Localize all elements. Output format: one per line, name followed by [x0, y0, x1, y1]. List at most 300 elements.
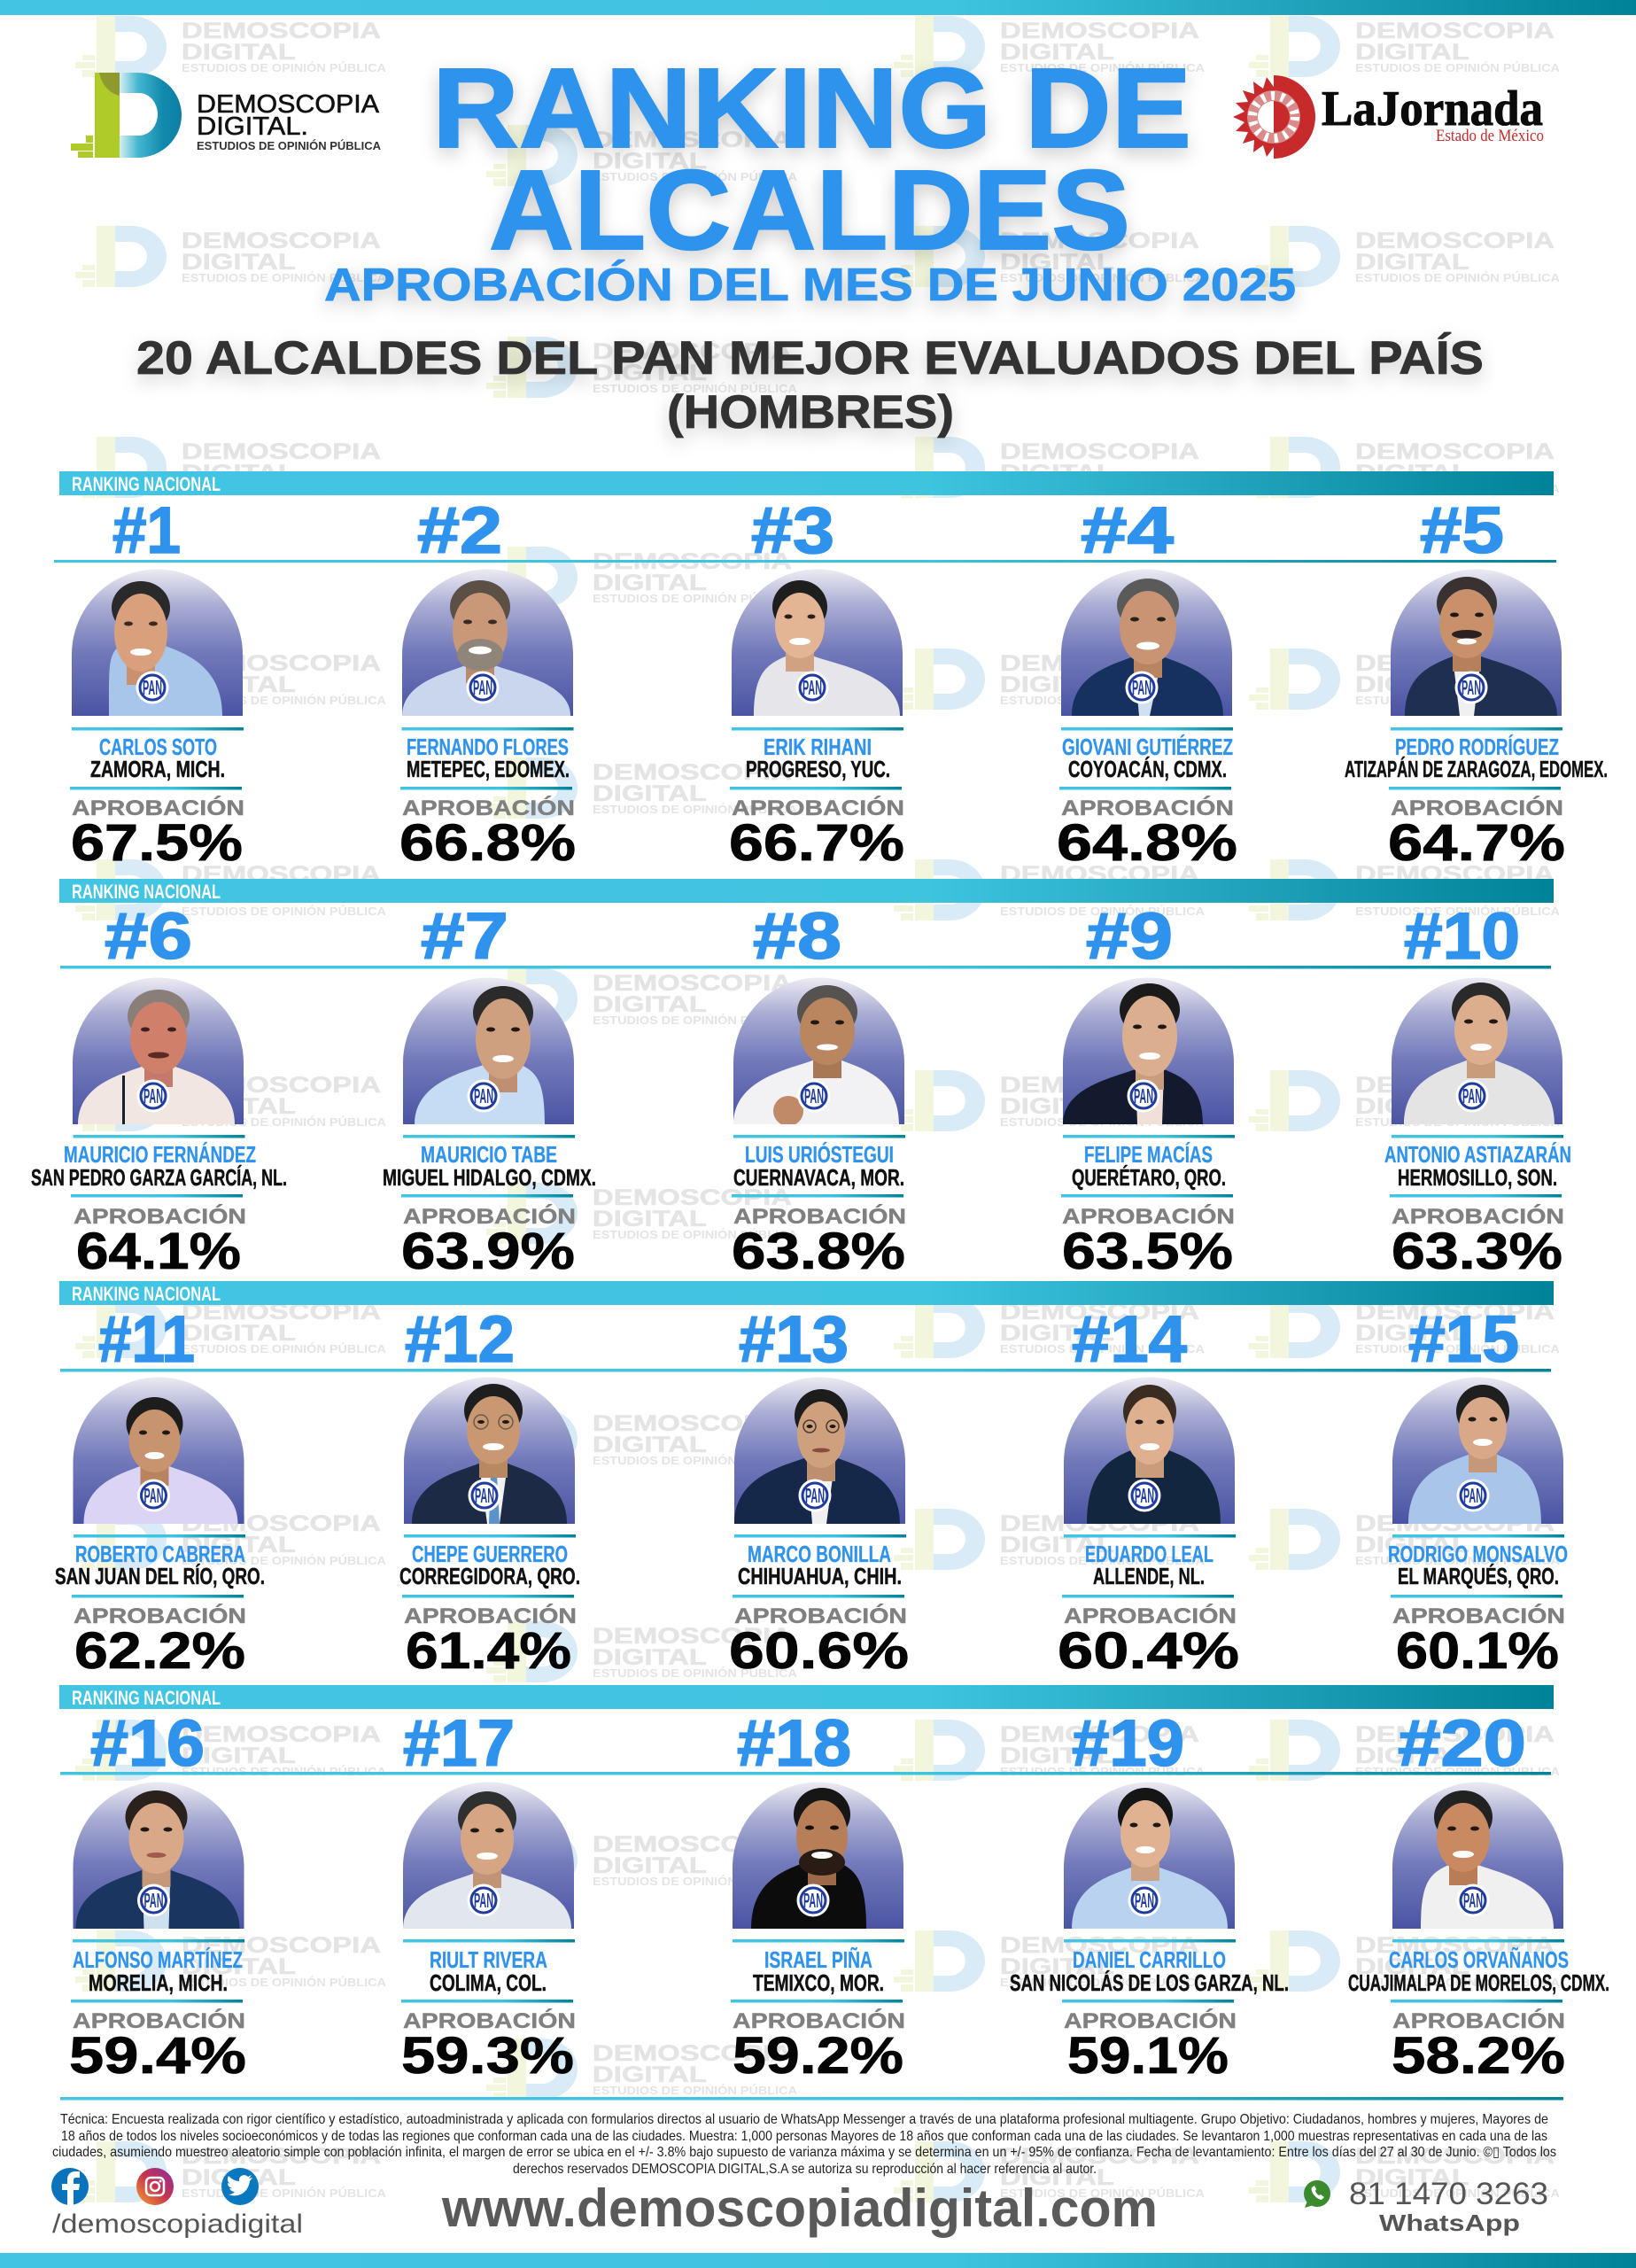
card: Mauricio Fernández: MAURICIO FERNÁNDEZ — [64, 1141, 256, 1168]
text: ESTUDIOS DE OPINIÓN PÚBLICA — [1355, 1115, 1561, 1129]
photo: Carlos Orvañanos: PAN — [1463, 1889, 1483, 1912]
heading: 20 alcaldes del PAN mejor evaluados — [136, 331, 1484, 439]
card: Carlos Orvañanos — [1348, 1706, 1609, 2085]
text: DIGITAL — [1355, 2165, 1469, 2190]
text: ESTUDIOS DE OPINIÓN PÚBLICA — [593, 1666, 798, 1680]
photo: Riult Rivera: PAN — [474, 1889, 493, 1912]
card: Roberto Cabrera: SAN JUAN DEL RÍO, QRO. — [55, 1563, 265, 1589]
card: Carlos Soto: APROBACIÓN — [72, 796, 244, 820]
card: Carlos Orvañanos: 58.2% — [1392, 2027, 1565, 2085]
card: Erik Rihani: 66.7% — [729, 814, 904, 872]
card: Mauricio Fernández — [31, 899, 287, 1280]
text: DIGITAL — [593, 992, 707, 1017]
text: ESTUDIOS DE OPINIÓN PÚBLICA — [1000, 2186, 1206, 2200]
card: Marco Bonilla: 60.6% — [729, 1622, 909, 1680]
text: ESTUDIOS DE OPINIÓN PÚBLICA — [1355, 482, 1561, 495]
card: Riult Rivera: COLIMA, COL. — [430, 1969, 547, 1996]
card: Felipe Macías: APROBACIÓN — [1062, 1204, 1235, 1229]
card: Giovani Gutiérrez — [1057, 493, 1237, 872]
text: DIGITAL — [1000, 1744, 1114, 1768]
card: Eduardo Leal: 60.4% — [1058, 1622, 1239, 1680]
text: DIGITAL — [593, 1433, 707, 1457]
text: DEMOSCOPIA — [1000, 862, 1199, 887]
photo: Fernando Flores — [402, 569, 573, 716]
text: DIGITAL — [593, 1207, 707, 1231]
photo: Fernando Flores: PAN — [473, 676, 492, 699]
text: ESTUDIOS DE OPINIÓN PÚBLICA — [1000, 61, 1206, 74]
text: DIGITAL — [593, 149, 707, 174]
photo: Marco Bonilla — [734, 1377, 905, 1524]
text: DIGITAL — [593, 1645, 707, 1670]
photo: Marco Bonilla: PAN — [805, 1484, 825, 1507]
text: DEMOSCOPIA — [1355, 1300, 1555, 1324]
text: ESTUDIOS DE OPINIÓN PÚBLICA — [1355, 1342, 1561, 1355]
text: DEMOSCOPIA — [1000, 1722, 1199, 1747]
card: Felipe Macías: FELIPE MACÍAS — [1084, 1141, 1213, 1168]
card: Israel Piña: TEMIXCO, MOR. — [753, 1969, 884, 1996]
card: Chepe Guerrero: APROBACIÓN — [404, 1604, 577, 1628]
card: Rodrigo Monsalvo: APROBACIÓN — [1392, 1604, 1565, 1628]
text: DIGITAL — [1000, 672, 1114, 697]
card: Marco Bonilla: CHIHUAHUA, CHIH. — [738, 1563, 902, 1589]
text: DIGITAL — [1000, 1321, 1114, 1346]
text: ESTUDIOS DE OPINIÓN PÚBLICA — [182, 694, 387, 707]
panel: ranking row 3: RANKING NACIONAL — [72, 1283, 221, 1305]
photo: Daniel Carrillo: PAN — [1135, 1889, 1154, 1912]
card: Alfonso Martínez: 59.4% — [69, 2027, 246, 2085]
icon: instagram — [136, 2168, 174, 2205]
text: DEMOSCOPIA — [593, 339, 792, 364]
card: Fernando Flores: #2 — [417, 493, 502, 567]
text: DIGITAL — [182, 1321, 296, 1346]
panel: ranking row 4: RANKING NACIONAL — [72, 1687, 221, 1709]
photo: Roberto Cabrera — [73, 1377, 244, 1524]
photo: Giovani Gutiérrez: PAN — [1132, 676, 1151, 699]
panel: ranking row 3 — [55, 1281, 1568, 1680]
card: Mauricio Fernández: APROBACIÓN — [74, 1204, 246, 1229]
card: Eduardo Leal: EDUARDO LEAL — [1085, 1541, 1213, 1567]
text: DEMOSCOPIA — [1355, 1511, 1555, 1536]
text: DEMOSCOPIA — [1355, 2144, 1555, 2169]
card: Rodrigo Monsalvo: #15 — [1408, 1302, 1519, 1376]
text: ESTUDIOS DE OPINIÓN PÚBLICA — [1000, 905, 1206, 918]
photo: Rodrigo Monsalvo — [1392, 1377, 1563, 1524]
card: Erik Rihani: #3 — [751, 493, 834, 567]
card: Giovani Gutiérrez: COYOACÁN, CDMX. — [1068, 756, 1227, 782]
photo: Felipe Macías — [1063, 978, 1234, 1124]
text: ESTUDIOS DE OPINIÓN PÚBLICA — [1355, 1765, 1561, 1778]
text: DIGITAL — [1355, 250, 1469, 275]
card: Fernando Flores: 66.8% — [399, 814, 576, 872]
text: ESTUDIOS DE OPINIÓN PÚBLICA — [1000, 482, 1206, 495]
heading: 20 alcaldes del PAN mejor evaluados: 20 ALCALDES DEL PAN MEJOR EVALUADOS DEL PAÍS — [136, 331, 1484, 384]
photo: Daniel Carrillo — [1064, 1783, 1235, 1929]
card: Israel Piña: ISRAEL PIÑA — [764, 1946, 872, 1973]
card: Erik Rihani: ERIK RIHANI — [764, 734, 872, 760]
card: Mauricio Tabe: 63.9% — [401, 1223, 575, 1280]
bottom gradient bar — [0, 2253, 1636, 2268]
text: ESTUDIOS DE OPINIÓN PÚBLICA — [182, 1554, 387, 1567]
photo: Alfonso Martínez — [73, 1783, 244, 1929]
text: ESTUDIOS DE OPINIÓN PÚBLICA — [1355, 694, 1561, 707]
card: Antonio Astiazarán: HERMOSILLO, SON. — [1398, 1164, 1557, 1191]
text: DIGITAL — [1000, 40, 1114, 65]
card: Daniel Carrillo: DANIEL CARRILLO — [1073, 1946, 1226, 1973]
top gradient bar — [0, 0, 1636, 15]
text: DEMOSCOPIA — [182, 1933, 381, 1958]
logo: La Jornada Estado de México: LaJornada — [1322, 82, 1543, 136]
photo: Rodrigo Monsalvo: PAN — [1463, 1484, 1483, 1507]
card: Chepe Guerrero — [399, 1302, 580, 1680]
card: Antonio Astiazarán: APROBACIÓN — [1392, 1204, 1564, 1229]
text: DIGITAL — [593, 571, 707, 595]
card: Luis Urióstegui: CUERNAVACA, MOR. — [733, 1164, 904, 1191]
text: DEMOSCOPIA — [593, 2041, 792, 2066]
text: DEMOSCOPIA — [182, 1511, 381, 1536]
card: Daniel Carrillo: #19 — [1072, 1706, 1184, 1780]
text: DIGITAL — [1000, 1533, 1114, 1557]
text: DIGITAL — [1000, 250, 1114, 275]
card: Giovani Gutiérrez: APROBACIÓN — [1061, 796, 1234, 820]
text: ESTUDIOS DE OPINIÓN PÚBLICA — [593, 592, 798, 605]
text: DIGITAL — [1355, 1954, 1469, 1979]
photo: Riult Rivera — [403, 1783, 574, 1929]
text: DIGITAL — [593, 2062, 707, 2087]
card: Roberto Cabrera — [55, 1302, 265, 1680]
text: DEMOSCOPIA — [182, 19, 381, 43]
card: Fernando Flores: FERNANDO FLORES — [407, 734, 569, 760]
card: Mauricio Tabe: MIGUEL HIDALGO, CDMX. — [383, 1164, 596, 1191]
photo: Mauricio Fernández — [73, 978, 244, 1124]
photo: Mauricio Fernández: PAN — [143, 1084, 163, 1107]
text: DEMOSCOPIA — [1355, 651, 1555, 676]
card: Alfonso Martínez: #16 — [90, 1706, 205, 1780]
photo: Erik Rihani — [732, 569, 903, 716]
card: Alfonso Martínez: APROBACIÓN — [73, 2008, 245, 2033]
text: ESTUDIOS DE OPINIÓN PÚBLICA — [1355, 1976, 1561, 1989]
card: Felipe Macías: QUERÉTARO, QRO. — [1072, 1164, 1226, 1191]
text: ESTUDIOS DE OPINIÓN PÚBLICA — [593, 2084, 798, 2097]
text: ESTUDIOS DE OPINIÓN PÚBLICA — [1000, 694, 1206, 707]
text: ESTUDIOS DE OPINIÓN PÚBLICA — [1000, 1976, 1206, 1989]
text: DIGITAL — [593, 1853, 707, 1878]
text: DEMOSCOPIA — [182, 862, 381, 887]
panel: ranking row 4 — [59, 1685, 1609, 2085]
card: Marco Bonilla: MARCO BONILLA — [748, 1541, 891, 1567]
text: DEMOSCOPIA — [1000, 229, 1199, 253]
text: DEMOSCOPIA — [1000, 2144, 1199, 2169]
card: Fernando Flores — [399, 493, 576, 872]
card: Mauricio Tabe: MAURICIO TABE — [421, 1141, 557, 1168]
card: Israel Piña — [731, 1706, 905, 2085]
logo: Demoscopia Digital: DIGITAL. — [197, 113, 308, 141]
text: DEMOSCOPIA — [1355, 19, 1555, 43]
text: DEMOSCOPIA — [1000, 1300, 1199, 1324]
logo: Demoscopia Digital: DEMOSCOPIA — [197, 90, 380, 119]
text: DIGITAL — [182, 2165, 296, 2190]
photo: Roberto Cabrera: PAN — [143, 1484, 163, 1507]
panel: ranking row 2 — [31, 879, 1571, 1280]
photo: Luis Urióstegui — [733, 978, 904, 1126]
panel: ranking row 2: RANKING NACIONAL — [72, 881, 221, 903]
card: Fernando Flores: APROBACIÓN — [402, 796, 575, 820]
card: Giovani Gutiérrez: #4 — [1081, 493, 1174, 567]
text: DIGITAL — [1355, 883, 1469, 908]
phone number: 81 1470 3263 — [1349, 2177, 1548, 2211]
card: Erik Rihani: PROGRESO, YUC. — [746, 756, 890, 782]
card: Mauricio Fernández: SAN PEDRO GARZA GARCÍA, NL. — [31, 1164, 287, 1191]
card: Israel Piña: #18 — [737, 1706, 851, 1780]
photo: Israel Piña — [733, 1783, 903, 1929]
logo: Demoscopia Digital: ESTUDIOS DE OPINIÓN PÚBLICA — [197, 139, 382, 152]
text: DIGITAL — [182, 672, 296, 697]
text: DIGITAL — [1355, 1744, 1469, 1768]
card: Luis Urióstegui: #8 — [753, 899, 841, 973]
card: Mauricio Tabe: APROBACIÓN — [403, 1204, 576, 1229]
text: ESTUDIOS DE OPINIÓN PÚBLICA — [182, 2186, 387, 2200]
card: Erik Rihani: APROBACIÓN — [732, 796, 904, 820]
card: Pedro Rodríguez: PEDRO RODRÍGUEZ — [1395, 734, 1559, 760]
text: DIGITAL — [1355, 1094, 1469, 1119]
card: Luis Urióstegui: LUIS URIÓSTEGUI — [745, 1141, 894, 1168]
text: DEMOSCOPIA — [593, 1832, 792, 1857]
photo: Carlos Orvañanos — [1392, 1783, 1563, 1929]
title: Ranking de Alcaldes: ALCALDES — [489, 147, 1130, 274]
text: DEMOSCOPIA — [182, 1300, 381, 1324]
text: DIGITAL — [182, 461, 296, 485]
card: Luis Urióstegui: 63.8% — [732, 1223, 905, 1280]
card: Israel Piña: APROBACIÓN — [733, 2008, 905, 2033]
text: DIGITAL — [593, 781, 707, 806]
logo: La Jornada Estado de México: Estado de México — [1436, 127, 1544, 145]
photo: Eduardo Leal — [1064, 1377, 1235, 1524]
card: Marco Bonilla: APROBACIÓN — [734, 1604, 907, 1628]
text: ESTUDIOS DE OPINIÓN PÚBLICA — [593, 382, 798, 395]
text: DIGITAL — [1000, 461, 1114, 485]
card: Rodrigo Monsalvo — [1388, 1302, 1568, 1680]
logo: Demoscopia Digital — [71, 73, 382, 158]
card: Felipe Macías: #9 — [1086, 899, 1173, 973]
text: ESTUDIOS DE OPINIÓN PÚBLICA — [593, 170, 798, 183]
text: ESTUDIOS DE OPINIÓN PÚBLICA — [182, 482, 387, 495]
card: Israel Piña: 59.2% — [733, 2027, 903, 2085]
panel: ranking row 1: RANKING NACIONAL — [72, 473, 221, 495]
card: Giovani Gutiérrez: GIOVANI GUTIÉRREZ — [1062, 734, 1233, 760]
card: Marco Bonilla: #13 — [739, 1302, 849, 1376]
card: Alfonso Martínez: ALFONSO MARTÍNEZ — [73, 1946, 243, 1973]
photo: Felipe Macías: PAN — [1134, 1084, 1153, 1107]
photo: Chepe Guerrero — [404, 1377, 575, 1524]
text: DEMOSCOPIA — [593, 128, 792, 152]
photo: Antonio Astiazarán — [1392, 978, 1562, 1124]
text: ESTUDIOS DE OPINIÓN PÚBLICA — [1000, 1554, 1206, 1567]
text: DIGITAL — [1000, 2165, 1114, 2190]
text: DIGITAL — [1355, 40, 1469, 65]
whatsapp label: WhatsApp — [1379, 2210, 1520, 2236]
text: ESTUDIOS DE OPINIÓN PÚBLICA — [182, 271, 387, 284]
card: Carlos Soto: ZAMORA, MICH. — [90, 756, 225, 782]
text: ESTUDIOS DE OPINIÓN PÚBLICA — [1355, 61, 1561, 74]
text: DIGITAL — [1355, 461, 1469, 485]
card: Daniel Carrillo: 59.1% — [1067, 2027, 1229, 2085]
photo: Alfonso Martínez: PAN — [143, 1889, 163, 1912]
card: Giovani Gutiérrez: 64.8% — [1057, 814, 1237, 872]
text: DIGITAL — [182, 40, 296, 65]
text: ESTUDIOS DE OPINIÓN PÚBLICA — [1355, 2186, 1561, 2200]
card: Antonio Astiazarán — [1384, 899, 1571, 1280]
card: Carlos Orvañanos: CARLOS ORVAÑANOS — [1389, 1946, 1569, 1973]
text: DIGITAL — [1355, 1533, 1469, 1557]
card: Carlos Soto — [70, 493, 244, 872]
card: Erik Rihani — [729, 493, 904, 872]
photo: Luis Urióstegui: PAN — [804, 1084, 824, 1107]
card: Pedro Rodríguez: #5 — [1420, 493, 1504, 567]
card: Pedro Rodríguez — [1345, 493, 1608, 872]
card: Chepe Guerrero: CORREGIDORA, QRO. — [399, 1563, 580, 1589]
text: ESTUDIOS DE OPINIÓN PÚBLICA — [182, 1976, 387, 1989]
text: DIGITAL — [182, 1094, 296, 1119]
card: Pedro Rodríguez: 64.7% — [1388, 814, 1565, 872]
text: DEMOSCOPIA — [593, 1185, 792, 1210]
card: Riult Rivera: #17 — [403, 1706, 515, 1780]
text: DIGITAL — [1000, 1954, 1114, 1979]
text: DIGITAL — [1000, 883, 1114, 908]
icon: twitter — [221, 2168, 259, 2205]
card: Eduardo Leal: APROBACIÓN — [1064, 1604, 1237, 1628]
card: Eduardo Leal: #14 — [1072, 1302, 1187, 1376]
text: DEMOSCOPIA — [1355, 439, 1555, 464]
methodology text block — [52, 2112, 1556, 2177]
text: DEMOSCOPIA — [182, 1073, 381, 1098]
card: Roberto Cabrera: 62.2% — [74, 1622, 245, 1680]
card: Antonio Astiazarán: 63.3% — [1392, 1223, 1562, 1280]
text: DEMOSCOPIA — [182, 439, 381, 464]
card: Antonio Astiazarán: #10 — [1404, 899, 1520, 973]
text: ESTUDIOS DE OPINIÓN PÚBLICA — [1355, 905, 1561, 918]
card: Rodrigo Monsalvo: EL MARQUÉS, QRO. — [1398, 1563, 1559, 1589]
card: Roberto Cabrera: #11 — [98, 1302, 195, 1376]
card: Mauricio Tabe: #7 — [421, 899, 508, 973]
text: ESTUDIOS DE OPINIÓN PÚBLICA — [1000, 1115, 1206, 1129]
card: Carlos Orvañanos: APROBACIÓN — [1392, 2008, 1565, 2033]
text: DEMOSCOPIA — [1000, 439, 1199, 464]
text: DIGITAL — [182, 1744, 296, 1768]
text: DEMOSCOPIA — [182, 2144, 381, 2169]
text: DEMOSCOPIA — [1000, 651, 1199, 676]
text: DIGITAL — [1000, 1094, 1114, 1119]
photo: Israel Piña: PAN — [803, 1889, 823, 1912]
card: Daniel Carrillo: SAN NICOLÁS DE LOS GARZA, NL. — [1010, 1969, 1289, 1996]
card: Carlos Soto: CARLOS SOTO — [99, 734, 217, 760]
text: ESTUDIOS DE OPINIÓN PÚBLICA — [593, 1875, 798, 1888]
photo: Carlos Soto — [72, 569, 243, 716]
card: Roberto Cabrera: APROBACIÓN — [74, 1604, 246, 1628]
text: DEMOSCOPIA — [182, 1722, 381, 1747]
text: DIGITAL — [1355, 672, 1469, 697]
text: ESTUDIOS DE OPINIÓN PÚBLICA — [593, 803, 798, 816]
text: DIGITAL — [1355, 1321, 1469, 1346]
text: DIGITAL — [182, 250, 296, 275]
card: Luis Urióstegui: APROBACIÓN — [733, 1204, 906, 1229]
photo: Carlos Soto: PAN — [143, 676, 162, 699]
text: DEMOSCOPIA — [593, 971, 792, 996]
text: DEMOSCOPIA — [1000, 1511, 1199, 1536]
text: ESTUDIOS DE OPINIÓN PÚBLICA — [593, 1454, 798, 1467]
text: DIGITAL — [593, 361, 707, 385]
photo: Mauricio Tabe — [403, 978, 574, 1124]
text: DEMOSCOPIA — [1355, 1722, 1555, 1747]
text: ESTUDIOS DE OPINIÓN PÚBLICA — [1000, 1342, 1206, 1355]
card: Mauricio Tabe — [383, 899, 596, 1280]
text: ESTUDIOS DE OPINIÓN PÚBLICA — [182, 1765, 387, 1778]
text: DEMOSCOPIA — [182, 651, 381, 676]
card: Chepe Guerrero: CHEPE GUERRERO — [412, 1541, 568, 1567]
card: Felipe Macías — [1061, 899, 1235, 1280]
text: ESTUDIOS DE OPINIÓN PÚBLICA — [1000, 1765, 1206, 1778]
photo: Giovani Gutiérrez — [1061, 569, 1232, 716]
photo: Eduardo Leal: PAN — [1135, 1484, 1154, 1507]
text: DIGITAL — [182, 1533, 296, 1557]
logo: La Jornada Estado de México — [1233, 75, 1544, 159]
card: Daniel Carrillo: APROBACIÓN — [1064, 2008, 1237, 2033]
website url: www.demoscopiadigital.com — [441, 2179, 1158, 2238]
panel: ranking row 1 — [54, 471, 1608, 872]
text: DIGITAL — [182, 883, 296, 908]
card: Eduardo Leal: ALLENDE, NL. — [1093, 1563, 1205, 1589]
photo: Pedro Rodríguez — [1391, 569, 1562, 716]
text: DEMOSCOPIA — [1000, 19, 1199, 43]
card: Marco Bonilla — [729, 1302, 909, 1680]
card: Rodrigo Monsalvo: 60.1% — [1396, 1622, 1559, 1680]
social handle: /demoscopiadigital — [52, 2210, 303, 2239]
text: ESTUDIOS DE OPINIÓN PÚBLICA — [1355, 271, 1561, 284]
text: DEMOSCOPIA — [593, 760, 792, 785]
card: Chepe Guerrero: #12 — [405, 1302, 515, 1376]
card: Chepe Guerrero: 61.4% — [406, 1622, 571, 1680]
card: Alfonso Martínez — [69, 1706, 246, 2085]
photo: Antonio Astiazarán: PAN — [1462, 1084, 1482, 1107]
text: DEMOSCOPIA — [1355, 1073, 1555, 1098]
card: Riult Rivera: 59.3% — [401, 2027, 574, 2085]
text: DEMOSCOPIA — [182, 229, 381, 253]
text: ESTUDIOS DE OPINIÓN PÚBLICA — [593, 1014, 798, 1027]
card: Rodrigo Monsalvo: RODRIGO MONSALVO — [1388, 1541, 1568, 1567]
card: Daniel Carrillo — [1010, 1706, 1289, 2085]
text: DIGITAL — [182, 1954, 296, 1979]
text: DEMOSCOPIA — [1355, 1933, 1555, 1958]
text: DEMOSCOPIA — [593, 1624, 792, 1649]
text: ESTUDIOS DE OPINIÓN PÚBLICA — [182, 61, 387, 74]
card: Roberto Cabrera: ROBERTO CABRERA — [75, 1541, 245, 1567]
card: Alfonso Martínez: MORELIA, MICH. — [89, 1969, 228, 1996]
card: Felipe Macías: 63.5% — [1062, 1223, 1233, 1280]
text: ESTUDIOS DE OPINIÓN PÚBLICA — [182, 1115, 387, 1129]
text: DEMOSCOPIA — [1355, 862, 1555, 887]
text: DEMOSCOPIA — [1355, 229, 1555, 253]
photo: Erik Rihani: PAN — [802, 676, 822, 699]
card: Mauricio Fernández: 64.1% — [76, 1223, 241, 1280]
card: Carlos Soto: 67.5% — [71, 814, 243, 872]
photo: Chepe Guerrero: PAN — [475, 1484, 494, 1507]
photo: Pedro Rodríguez: PAN — [1462, 676, 1481, 699]
text: ESTUDIOS DE OPINIÓN PÚBLICA — [182, 1342, 387, 1355]
icon: facebook — [51, 2168, 89, 2205]
card: Fernando Flores: METEPEC, EDOMEX. — [407, 756, 570, 782]
card: Carlos Orvañanos: #20 — [1398, 1706, 1526, 1780]
title: Ranking de Alcaldes — [432, 45, 1191, 274]
text: ESTUDIOS DE OPINIÓN PÚBLICA — [593, 1228, 798, 1241]
text: ESTUDIOS DE OPINIÓN PÚBLICA — [182, 905, 387, 918]
